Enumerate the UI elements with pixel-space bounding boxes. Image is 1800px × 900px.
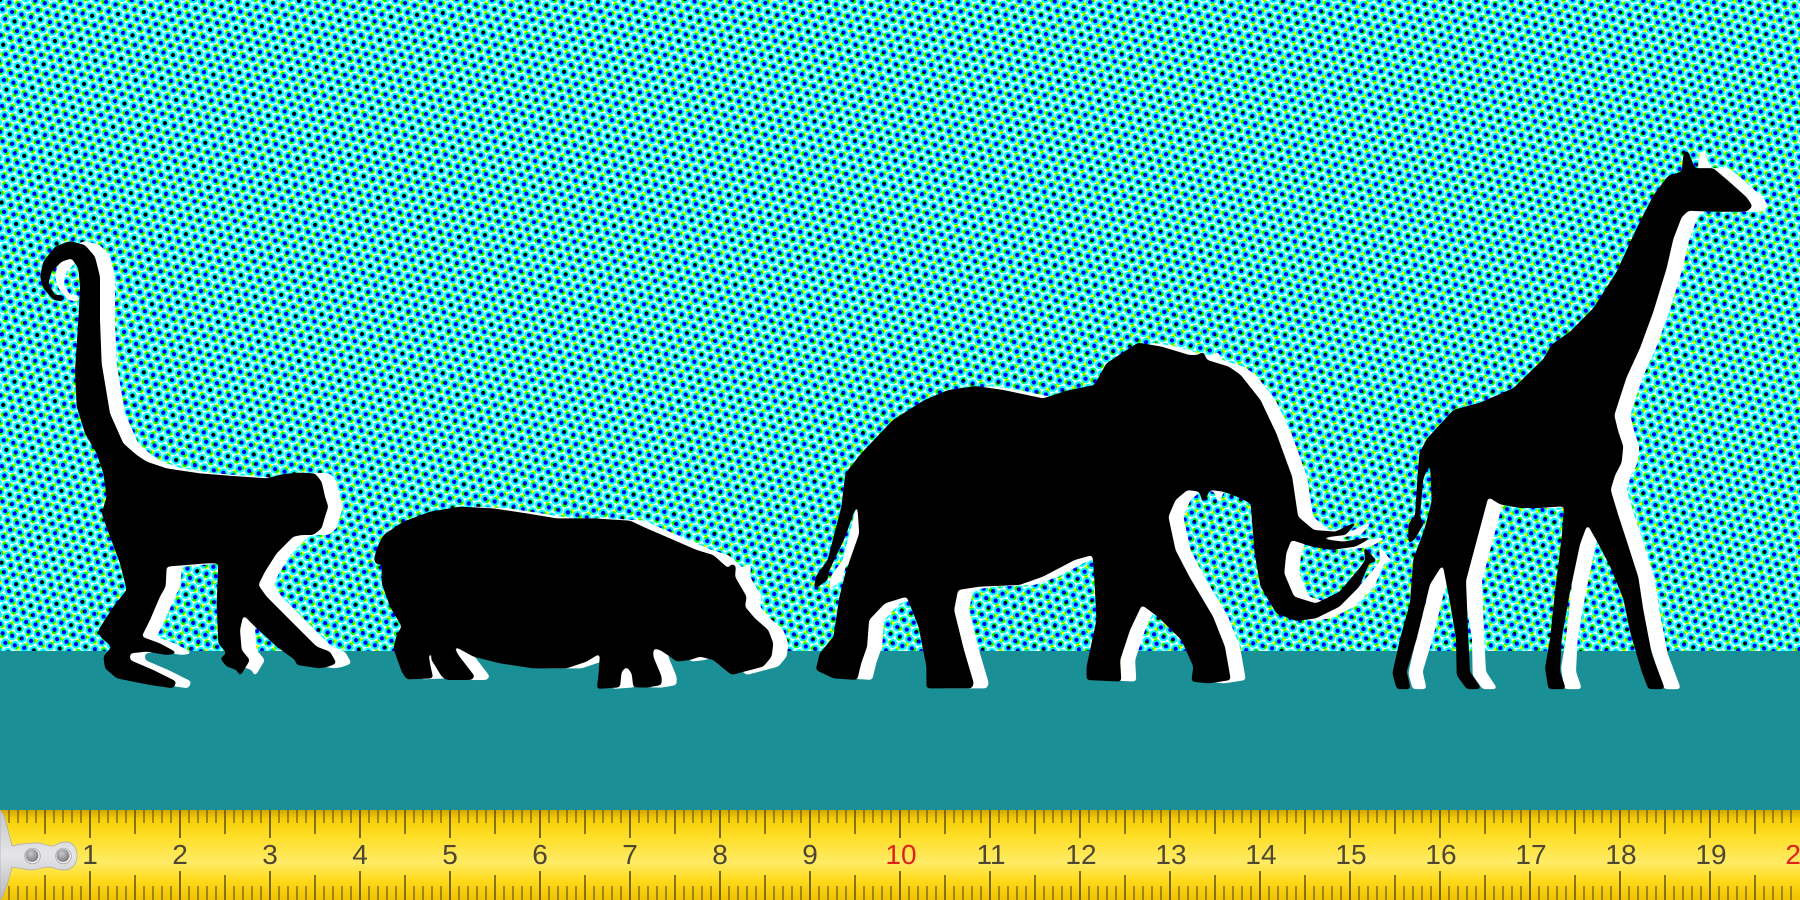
icon: giraffe silhouette (1392, 150, 1769, 689)
tape major ticks (90, 810, 1710, 900)
tape numbers: 11 (976, 839, 1006, 870)
tape numbers: 18 (1605, 839, 1637, 870)
tape numbers: 15 (1335, 839, 1367, 870)
tape numbers: 19 (1695, 839, 1727, 870)
tape numbers: 16 (1425, 839, 1457, 870)
tape numbers: 8 (712, 839, 728, 870)
tape body (0, 810, 1800, 900)
halftone dot background (0, 0, 1800, 652)
tape numbers: 10 (885, 839, 917, 870)
tape numbers: 9 (802, 839, 818, 870)
tape numbers: 6 (532, 839, 548, 870)
tape numbers: 17 (1515, 839, 1547, 870)
tape numbers: 4 (352, 839, 368, 870)
tape numbers: 7 (622, 839, 638, 870)
tape numbers: 5 (442, 839, 458, 870)
tape numbers: 2 (172, 839, 188, 870)
icon: elephant silhouette (814, 343, 1392, 688)
tape numbers: 3 (262, 839, 278, 870)
tape half-unit ticks (45, 810, 1755, 900)
tape measure (0, 810, 1800, 900)
icon: hippo silhouette (374, 507, 788, 689)
steel hook with tab (0, 810, 77, 900)
tape numbers (82, 839, 1800, 870)
rivet right (56, 848, 71, 864)
tape minor ticks bottom edge (9, 886, 1791, 900)
rivet left (25, 848, 40, 864)
teal ground band (0, 651, 1800, 811)
icon: monkey silhouette (40, 241, 352, 688)
tape minor ticks (9, 810, 1791, 823)
tape numbers: 1 (82, 839, 98, 870)
tape numbers: 14 (1245, 839, 1277, 870)
tape numbers: 13 (1155, 839, 1187, 870)
tape numbers: 12 (1065, 839, 1097, 870)
